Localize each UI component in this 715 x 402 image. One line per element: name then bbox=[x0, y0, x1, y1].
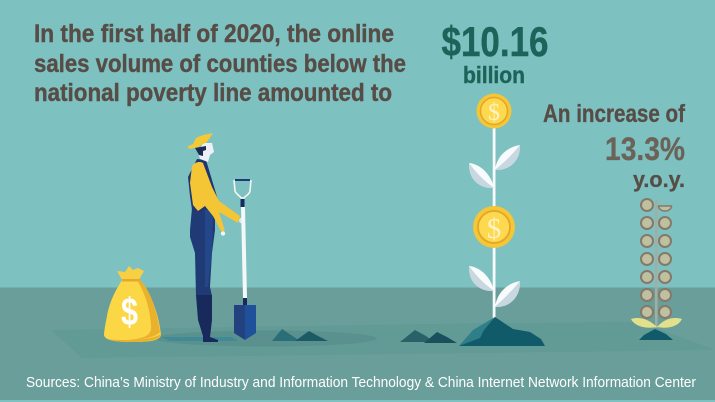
icon: farmer bbox=[187, 133, 245, 342]
vest back bbox=[188, 159, 218, 212]
icon: money bag: $ bbox=[121, 291, 138, 334]
upper coin bbox=[476, 94, 512, 128]
boots bbox=[196, 295, 218, 342]
upper left leaf bbox=[469, 163, 494, 188]
lower right leaf bbox=[495, 281, 520, 307]
upper right leaf bbox=[495, 145, 520, 170]
shirt bbox=[190, 162, 240, 231]
title: national poverty line amounted to bbox=[34, 79, 392, 107]
stem bbox=[493, 125, 496, 320]
icon: soil mounds left bbox=[272, 329, 328, 341]
amount: $10.16 billion bbox=[442, 18, 548, 88]
plant with coins bbox=[459, 94, 545, 346]
upper coin: $ bbox=[488, 100, 500, 126]
increase text: y.o.y. bbox=[633, 167, 685, 192]
soil mound bbox=[459, 317, 545, 346]
amount: $10.16 billion: $10.16 bbox=[442, 18, 548, 65]
sources: Sources: China’s Ministry of Industry and Information Technology & China Internet Network Information Center bbox=[26, 375, 696, 391]
increase text bbox=[543, 100, 686, 192]
amount: $10.16 billion: billion bbox=[463, 62, 525, 88]
hands bbox=[221, 231, 225, 236]
lower coin bbox=[473, 206, 515, 248]
icon: soil mounds right bbox=[400, 330, 457, 343]
hat bbox=[187, 133, 213, 149]
increase text: An increase of bbox=[543, 100, 686, 128]
ground bbox=[0, 288, 715, 400]
icon: shovel bbox=[234, 179, 256, 340]
overalls bbox=[190, 208, 215, 296]
lower coin: $ bbox=[487, 213, 501, 245]
head bbox=[198, 143, 214, 162]
icon: money bag bbox=[104, 266, 161, 342]
title bbox=[34, 20, 406, 107]
lower left leaf bbox=[469, 266, 494, 291]
icon: small plant with seed column bbox=[631, 199, 682, 340]
title: In the first half of 2020, the online bbox=[34, 20, 394, 48]
increase text: 13.3% bbox=[605, 131, 685, 167]
title: sales volume of counties below the bbox=[34, 50, 406, 78]
